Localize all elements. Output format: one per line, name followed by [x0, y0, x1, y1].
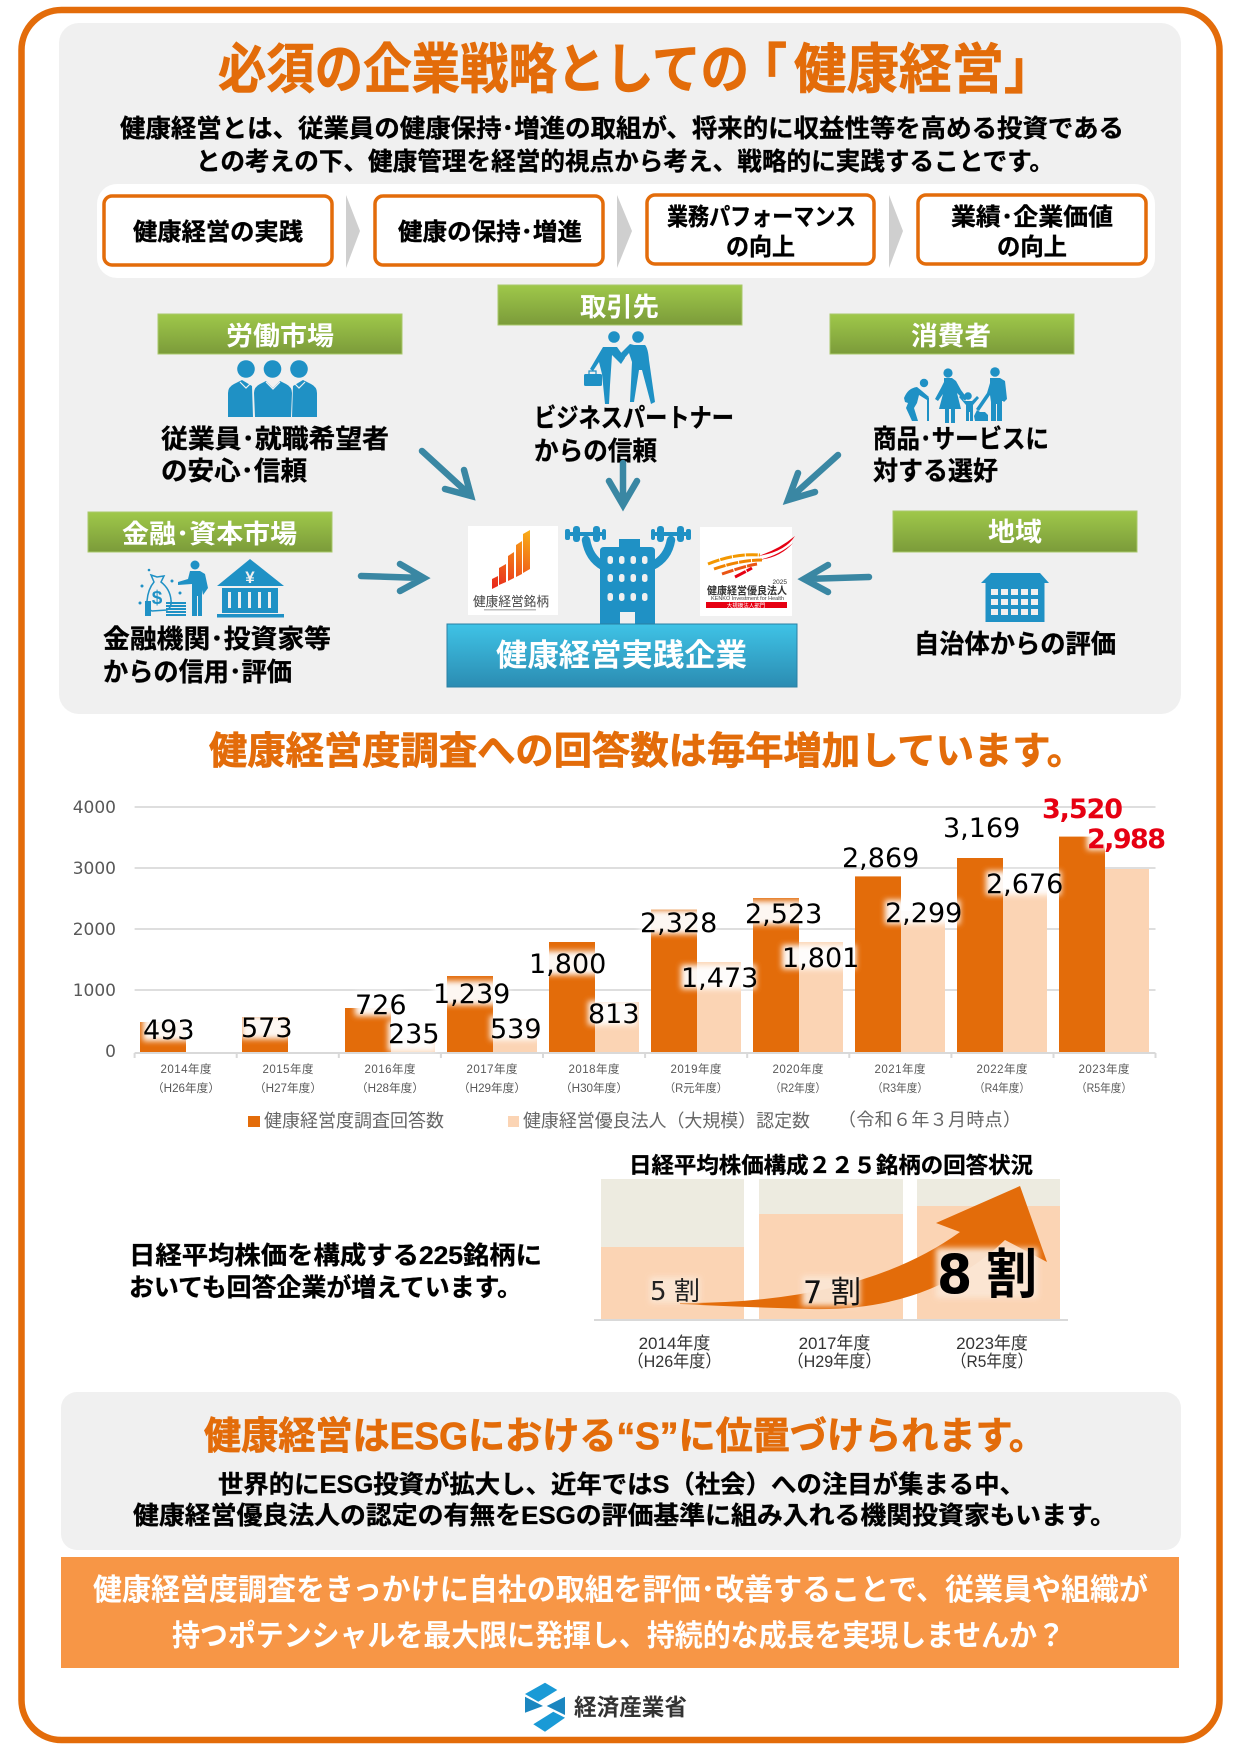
icon: investor: $ — [152, 588, 163, 609]
x axis labels: 2019年度 — [670, 1062, 722, 1076]
x axis labels: （H26年度） — [152, 1081, 220, 1095]
company banner: 健康経営実践企業 — [496, 638, 747, 673]
bar chart: survey responses and certifications — [73, 794, 1166, 1131]
stakeholder: business partners — [498, 285, 742, 466]
step 1: 健康経営の実践 — [133, 219, 303, 246]
value labels: 7 割 — [803, 1275, 861, 1311]
x axis labels: 2015年度 — [262, 1062, 314, 1076]
data labels: 2,676 — [986, 869, 1063, 900]
data labels: 1,473 — [681, 963, 758, 994]
label glows — [650, 1248, 1038, 1306]
stakeholder: financial markets: 金融機関･投資家等 — [103, 624, 331, 654]
x axis labels: 2018年度 — [568, 1062, 620, 1076]
data labels: 493 — [143, 1015, 195, 1046]
data labels: 813 — [588, 999, 640, 1030]
call to action band: 健康経営度調査をきっかけに自社の取組を評価･改善することで、従業員や組織が — [93, 1573, 1148, 1607]
data labels: 2,869 — [842, 843, 919, 874]
icon: bank: ¥ — [245, 568, 255, 587]
logo: health stock brand: 健康経営銘柄 — [473, 594, 549, 609]
legend: 健康経営度調査回答数 — [264, 1111, 444, 1131]
arrow: partners to company — [609, 463, 637, 505]
legend — [248, 1110, 1021, 1131]
year labels: （R5年度） — [951, 1352, 1033, 1371]
data labels: 2,988 — [1087, 824, 1166, 855]
arrow: finance to company — [361, 564, 424, 591]
logo: health and productivity certified: 健康経営優良法人 — [707, 584, 787, 597]
data labels: 1,801 — [782, 943, 859, 974]
x axis labels: （R元年度） — [664, 1081, 728, 1095]
value labels — [650, 1243, 1037, 1311]
stakeholder: labour market: の安心･信頼 — [161, 456, 307, 486]
logo: METI — [525, 1683, 687, 1732]
year labels — [628, 1334, 1033, 1371]
step 3: 業務パフォーマンス — [667, 204, 856, 231]
x axis labels: 2021年度 — [874, 1062, 926, 1076]
icon: family — [904, 367, 1007, 423]
call to action band — [61, 1557, 1179, 1668]
step 1 — [104, 196, 332, 265]
x axis labels: 2020年度 — [772, 1062, 824, 1076]
heading: survey responses: 健康経営度調査への回答数は毎年増加しています。 — [209, 731, 1085, 773]
label glows — [143, 826, 1166, 1051]
step 2 — [375, 196, 603, 265]
arrow: step 2 to 3 — [617, 195, 632, 268]
x axis labels: 2016年度 — [364, 1062, 416, 1076]
data labels: 1,800 — [529, 949, 606, 980]
y axis labels — [73, 798, 116, 1062]
title: 」 — [1004, 40, 1054, 100]
data labels: 573 — [241, 1013, 293, 1044]
logo: METI: 経済産業省 — [574, 1694, 687, 1720]
x axis labels: 2017年度 — [466, 1062, 518, 1076]
y axis labels: 3000 — [73, 859, 116, 879]
x axis labels: （H27年度） — [254, 1081, 322, 1095]
heading: 健康経営はESGにおける“S”に位置づけられます。 — [204, 1416, 1046, 1458]
y axis labels: 4000 — [73, 798, 116, 818]
intro text: 健康経営とは、従業員の健康保持･増進の取組が、将来的に収益性等を高める投資である — [120, 114, 1124, 143]
stakeholder: community: 地域 — [988, 517, 1042, 547]
title: 「 — [737, 40, 787, 100]
stakeholder: business partners: 取引先 — [580, 292, 659, 322]
process flow — [97, 184, 1155, 278]
logo: health stock brand — [468, 526, 558, 615]
x axis labels: 2014年度 — [160, 1062, 212, 1076]
title: 健康経営 — [794, 40, 1004, 100]
icon: bank — [217, 559, 284, 618]
call to action band: 持つポテンシャルを最大限に発揮し、持続的な成長を実現しませんか？ — [172, 1620, 1065, 1653]
x axis labels: （R5年度） — [1076, 1081, 1132, 1095]
body text — [133, 1470, 1116, 1530]
step 4: 業績･企業価値 — [951, 204, 1113, 231]
y axis labels: 0 — [105, 1042, 116, 1062]
step 3 — [647, 195, 874, 264]
legend: 健康経営優良法人（大規模）認定数 — [523, 1111, 810, 1131]
stakeholder: labour market: 労働市場 — [226, 321, 334, 351]
logo: health and productivity certified: 大規模法人部門 — [727, 602, 766, 610]
x axis labels — [152, 1062, 1132, 1095]
arrow: step 1 to 2 — [346, 195, 360, 268]
step 2: 健康の保持･増進 — [398, 219, 582, 246]
x axis labels: （H30年度） — [560, 1081, 628, 1095]
data labels: 2,299 — [885, 898, 962, 929]
step 4 — [918, 195, 1146, 264]
stakeholder: consumers: 対する選好 — [873, 456, 998, 486]
stakeholder: consumers — [830, 314, 1074, 486]
intro text — [120, 114, 1124, 176]
stakeholder: financial markets — [88, 512, 332, 687]
year labels: （H29年度） — [788, 1352, 882, 1371]
stakeholder: community — [893, 511, 1137, 659]
arrow: labour market to company — [422, 451, 471, 496]
title: 必須の企業戦略としての — [218, 40, 749, 100]
data labels: 3,520 — [1042, 794, 1123, 825]
icon: employees — [228, 360, 317, 417]
chart title: 日経平均株価構成２２５銘柄の回答状況 — [629, 1153, 1033, 1178]
arrow: community to company — [804, 565, 869, 592]
x axis labels: （R4年度） — [974, 1081, 1030, 1095]
icon: handshake — [584, 331, 655, 404]
x axis labels: （R2年度） — [770, 1081, 826, 1095]
bars: certified companies — [391, 869, 1149, 1052]
chart: Nikkei 225 response rate — [594, 1153, 1068, 1371]
data labels: 1,239 — [433, 979, 510, 1010]
legend: （令和６年３月時点） — [838, 1110, 1021, 1130]
data labels: 3,169 — [943, 813, 1020, 844]
body text: 健康経営優良法人の認定の有無をESGの評価基準に組み入れる機関投資家もいます。 — [133, 1502, 1116, 1530]
stakeholder: business partners: からの信頼 — [534, 436, 657, 466]
y axis labels: 2000 — [73, 920, 116, 940]
arrow: consumers to company — [788, 455, 838, 500]
arrow: growth — [680, 1186, 1047, 1309]
stakeholder: business partners: ビジネスパートナー — [534, 403, 734, 433]
year labels: （H26年度） — [628, 1352, 722, 1371]
text: Nikkei 225 note: 日経平均株価を構成する225銘柄に — [129, 1242, 542, 1270]
text: Nikkei 225 note — [129, 1242, 542, 1302]
year labels: 2017年度 — [799, 1334, 870, 1353]
step 3: の向上 — [726, 234, 795, 261]
arrow: step 3 to 4 — [889, 195, 903, 268]
x axis labels: （H29年度） — [458, 1081, 526, 1095]
text: Nikkei 225 note: おいても回答企業が増えています。 — [129, 1273, 522, 1302]
company banner — [447, 624, 797, 687]
body text: 世界的にESG投資が拡大し、近年ではS（社会）への注目が集まる中、 — [218, 1470, 1025, 1499]
stakeholder: community: 自治体からの評価 — [914, 629, 1116, 659]
logo: health and productivity certified: 2025 — [773, 579, 787, 586]
icon: investor — [138, 560, 208, 616]
y axis labels: 1000 — [73, 981, 116, 1001]
icon: municipal building — [981, 573, 1049, 622]
stakeholder: consumers: 消費者 — [911, 321, 991, 351]
year labels: 2014年度 — [639, 1334, 710, 1353]
value labels: 5 割 — [650, 1276, 700, 1307]
x axis labels: 2023年度 — [1078, 1062, 1130, 1076]
x axis labels: （R3年度） — [872, 1081, 928, 1095]
value labels: 8 割 — [937, 1243, 1037, 1306]
data labels: 235 — [388, 1019, 440, 1050]
panel: what is health management — [59, 23, 1181, 714]
data labels — [143, 794, 1166, 1050]
stakeholder: labour market: 従業員･就職希望者 — [161, 424, 389, 454]
data labels: 539 — [490, 1014, 542, 1045]
data labels: 726 — [355, 990, 407, 1021]
stakeholder: labour market — [158, 314, 402, 486]
stakeholder: financial markets: 金融･資本市場 — [122, 519, 297, 549]
icon: strong company building — [565, 526, 691, 627]
bars: survey responses — [140, 837, 1105, 1052]
stakeholder: consumers: 商品･サービスに — [873, 424, 1049, 454]
x axis labels: 2022年度 — [976, 1062, 1028, 1076]
data labels: 2,523 — [745, 899, 822, 930]
panel: ESG — [61, 1392, 1181, 1550]
x axis labels: （H28年度） — [356, 1081, 424, 1095]
step 4: の向上 — [997, 234, 1067, 261]
logo: health and productivity certified: KENKO Investment for Health — [711, 596, 784, 602]
stakeholder: financial markets: からの信用･評価 — [103, 657, 292, 687]
year labels: 2023年度 — [956, 1334, 1028, 1353]
data labels: 2,328 — [640, 908, 717, 939]
logo: health and productivity certified — [700, 527, 795, 616]
intro text: との考えの下、健康管理を経営的視点から考え、戦略的に実践することです。 — [196, 148, 1054, 176]
